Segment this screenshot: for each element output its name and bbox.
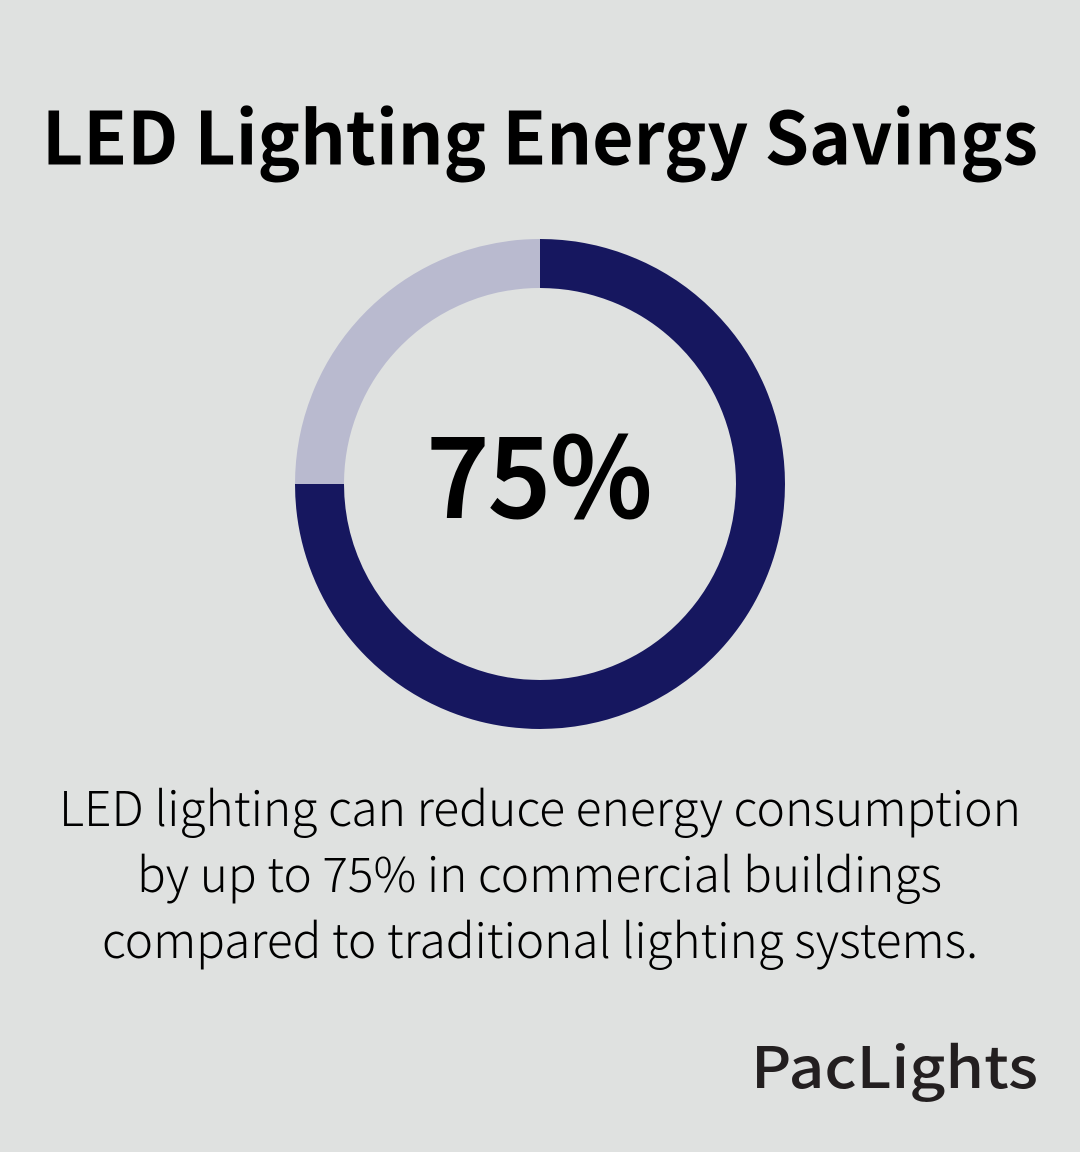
donut chart: 75% (320, 264, 760, 704)
remaining 25% segment (320, 264, 540, 484)
donut centre value: 75% (427, 389, 652, 549)
description text: LED lighting can reduce energy consumption (59, 770, 1021, 840)
description text (59, 770, 1021, 972)
highlighted 75% segment (320, 264, 760, 704)
description text: compared to traditional lighting systems. (102, 902, 978, 972)
title: LED Lighting Energy Savings (42, 80, 1038, 186)
logo: PacLights: PacLights (751, 1023, 1038, 1105)
description text: by up to 75% in commercial buildings (137, 836, 942, 906)
